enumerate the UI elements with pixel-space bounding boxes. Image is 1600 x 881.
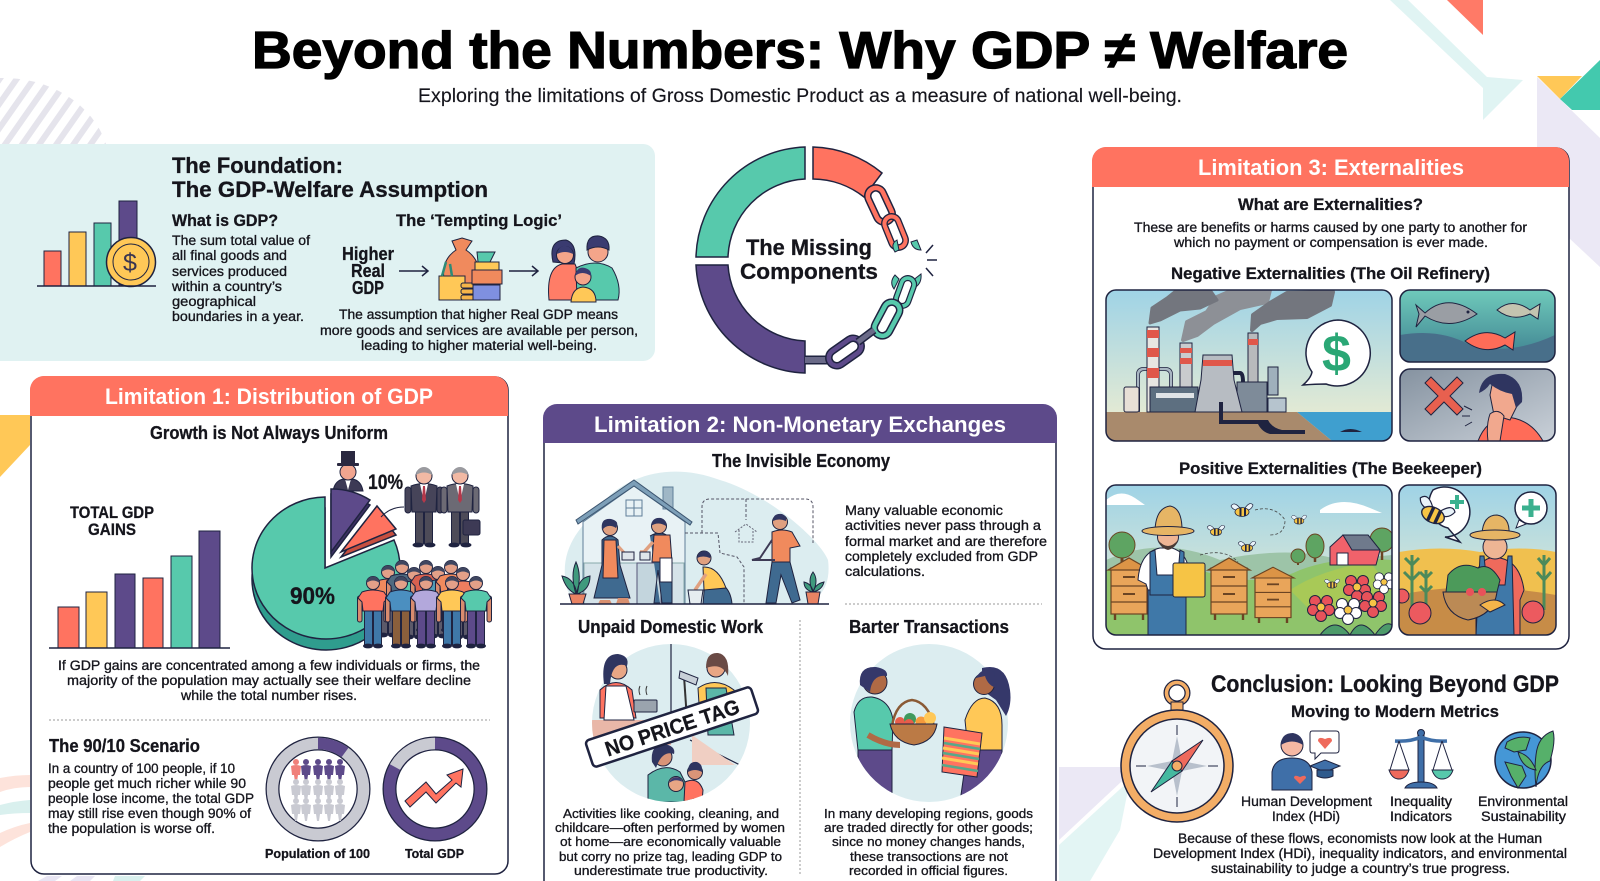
person kneeling with basket xyxy=(688,551,732,604)
what are externalities: What are Externalities? xyxy=(1238,195,1423,214)
invisible economy text: Many valuable economic xyxy=(845,503,1003,518)
metric: human development index: Index (HDi) xyxy=(1272,809,1340,824)
icon: compass xyxy=(1121,682,1233,822)
chain ring: the missing components xyxy=(696,147,937,373)
icon: crowd of people xyxy=(358,560,492,648)
tempting logic heading: The ‘Tempting Logic’ xyxy=(396,211,562,230)
total GDP label: GAINS xyxy=(88,520,136,539)
invisible economy text: completely excluded from GDP xyxy=(845,549,1038,564)
woman cooking xyxy=(594,519,634,604)
foundation heading: The Foundation: xyxy=(172,153,343,178)
barter text: these transoctions are not xyxy=(850,849,1008,864)
donut: population of 100 xyxy=(272,744,364,834)
donut labels xyxy=(265,846,464,861)
panel: limitation 1 xyxy=(30,376,508,874)
fruit basket xyxy=(890,700,937,745)
illustration: barter xyxy=(850,644,1010,802)
90/10 scenario text: The 90/10 Scenario xyxy=(49,736,200,756)
unpaid work text: but corry no prize tag, leading GDP to xyxy=(559,849,782,864)
metric: environmental sustainability: Sustainability xyxy=(1481,809,1566,824)
teal links xyxy=(871,276,916,339)
panel: foundation xyxy=(0,144,655,361)
ring label xyxy=(740,235,878,284)
illustration: coughing person xyxy=(1400,369,1555,441)
donut: total GDP xyxy=(390,743,480,834)
negative externalities heading: Negative Externalities (The Oil Refinery) xyxy=(1171,264,1490,283)
broken teal tips xyxy=(892,240,921,289)
barter text xyxy=(824,806,1034,878)
illustration: polluted fish xyxy=(1400,290,1555,362)
plant pots xyxy=(562,562,824,604)
icon: bar chart with coin xyxy=(37,201,156,286)
metric: environmental sustainability xyxy=(1478,731,1568,824)
speech bubble: plus xyxy=(1515,492,1547,528)
ring: purple segment xyxy=(696,265,805,373)
ring label: Components xyxy=(740,259,878,284)
what are externalities xyxy=(1134,195,1528,250)
pie chart: 90/10 xyxy=(252,489,404,650)
ring label: The Missing xyxy=(746,235,872,260)
conclusion text: Because of these flows, economists now look at the Human xyxy=(1178,831,1542,846)
90 percent label: 90% xyxy=(290,583,335,610)
spark lines xyxy=(926,245,937,276)
what is GDP: all final goods and xyxy=(172,248,287,263)
distribution text xyxy=(58,658,480,703)
limitation 2 header: Limitation 2: Non-Monetary Exchanges xyxy=(594,412,1006,437)
10 percent label: 10% xyxy=(368,471,403,494)
90/10 scenario text xyxy=(48,736,254,836)
metric: human development index xyxy=(1241,731,1372,824)
conclusion section xyxy=(1121,671,1568,876)
conclusion text: sustainability to judge a country’s true progress. xyxy=(1211,861,1510,876)
assumption text: The assumption that higher Real GDP means xyxy=(339,307,618,322)
higher real GDP label: Real xyxy=(351,261,385,281)
barter text: In many developing regions, goods xyxy=(824,806,1034,821)
foundation heading: The GDP-Welfare Assumption xyxy=(172,177,488,202)
what is GDP: boundaries in a year. xyxy=(172,309,304,324)
metric: human development index: Human Development xyxy=(1241,794,1372,809)
foundation heading xyxy=(172,153,488,202)
metric: environmental sustainability: Environmental xyxy=(1478,794,1568,809)
woman with mop xyxy=(679,653,738,735)
unpaid work text: Activities like cooking, cleaning, and xyxy=(563,806,779,821)
coral links xyxy=(865,185,908,250)
assumption text: leading to higher material well-being. xyxy=(361,338,597,353)
what are externalities: These are benefits or harms caused by one party to another for xyxy=(1134,220,1528,235)
donut labels: Population of 100 xyxy=(265,846,370,861)
purple links xyxy=(805,330,874,369)
farmer figure xyxy=(1443,515,1524,635)
woman at stove xyxy=(600,654,657,720)
metric: inequality indicators: Indicators xyxy=(1390,809,1452,824)
woman with cloth xyxy=(942,667,1010,802)
metric: inequality indicators: Inequality xyxy=(1390,794,1452,809)
90/10 scenario text: people lose income, the total GDP xyxy=(48,791,254,806)
distribution text: If GDP gains are concentrated among a few individuals or firms, the xyxy=(58,658,480,673)
conclusion text xyxy=(1153,831,1567,876)
conclusion heading: Moving to Modern Metrics xyxy=(1291,702,1499,721)
invisible economy text: formal market and are therefore xyxy=(845,534,1047,549)
conclusion text: Development Index (HDi), inequality indicators, and environmental xyxy=(1153,846,1567,861)
tag: no price tag: NO PRICE TAG xyxy=(602,696,743,761)
unpaid work text: ot home—are economically valuable xyxy=(560,834,781,849)
invisible economy text: calculations. xyxy=(845,564,925,579)
90/10 scenario text: people get much richer while 90 xyxy=(48,776,246,791)
what is GDP xyxy=(171,211,310,324)
assumption text xyxy=(320,307,638,353)
limitation 1 header xyxy=(30,376,508,416)
limitation 2 header xyxy=(543,404,1057,443)
what is GDP: within a country’s xyxy=(171,279,282,294)
unpaid work text: childcare—often performed by women xyxy=(555,820,785,835)
icon: top hat man xyxy=(333,451,363,491)
icon: red cross xyxy=(1425,377,1463,415)
icon: bar chart with coin: $ xyxy=(123,249,137,277)
illustration: beekeeper xyxy=(1106,485,1395,635)
icon: family xyxy=(549,236,619,302)
donut labels: Total GDP xyxy=(405,846,464,861)
barter heading: Barter Transactions xyxy=(849,617,1009,637)
what is GDP: services produced xyxy=(172,264,287,279)
illustration: unpaid work xyxy=(585,644,759,802)
total GDP label: TOTAL GDP xyxy=(70,503,154,522)
what are externalities: which no payment or compensation is ever made. xyxy=(1173,235,1488,250)
limitation 1 header: Limitation 1: Distribution of GDP xyxy=(105,384,433,409)
barter text: recorded in official figures. xyxy=(849,863,1008,878)
limitation 3 header xyxy=(1092,147,1569,187)
higher real GDP label: Higher xyxy=(342,244,394,264)
distribution text: majority of the population may actually see their welfare decline xyxy=(67,673,471,688)
panel: limitation 3 xyxy=(1092,147,1569,649)
icon: two businessmen xyxy=(405,467,480,547)
ring: coral segment xyxy=(813,147,882,197)
man with basket xyxy=(854,667,900,802)
invisible economy heading: The Invisible Economy xyxy=(712,451,890,471)
what is GDP: geographical xyxy=(172,294,256,309)
what is GDP: The sum total value of xyxy=(172,233,310,248)
90/10 scenario text: may still rise even though 90% of xyxy=(48,806,251,821)
total GDP label xyxy=(70,503,154,539)
mother and children xyxy=(648,744,703,802)
90/10 scenario text: the population is worse off. xyxy=(48,821,215,836)
bar chart: total GDP gains xyxy=(49,531,230,648)
title: Beyond the Numbers: Why GDP ≠ Welfare xyxy=(252,22,1348,80)
man with broom xyxy=(752,514,800,603)
conclusion heading: Conclusion: Looking Beyond GDP xyxy=(1211,671,1559,698)
distribution text: while the total number rises. xyxy=(180,688,357,703)
speech bubble: bee xyxy=(1413,487,1470,542)
icon: rising arrow xyxy=(405,769,463,807)
invisible economy text xyxy=(845,503,1047,579)
population icons xyxy=(291,759,345,821)
beekeeper figure xyxy=(1138,506,1205,635)
icon: goods stack xyxy=(439,238,502,300)
illustration: invisible economy xyxy=(560,472,829,604)
unpaid work text xyxy=(555,806,785,878)
limitation 3 header: Limitation 3: Externalities xyxy=(1198,155,1464,180)
invisible economy text: activities never pass through a xyxy=(845,518,1042,533)
subtitle: Exploring the limitations of Gross Domestic Product as a measure of national well-being. xyxy=(418,86,1182,107)
higher real GDP label xyxy=(342,244,394,298)
man cooking xyxy=(640,518,672,603)
unpaid work text: underestimate true productivity. xyxy=(574,863,768,878)
metric: inequality indicators xyxy=(1389,730,1453,824)
growth heading: Growth is Not Always Uniform xyxy=(150,423,388,443)
ring: teal segment xyxy=(696,147,805,257)
speech bubble: dollar xyxy=(1303,320,1370,386)
speech bubble: dollar: $ xyxy=(1322,325,1351,383)
arrow: goods to family xyxy=(509,266,538,276)
90/10 scenario text: In a country of 100 people, if 10 xyxy=(48,761,235,776)
arrow: GDP to goods xyxy=(399,266,428,276)
what is GDP: What is GDP? xyxy=(172,211,278,230)
barter text: are traded directly for other goods; xyxy=(824,820,1033,835)
illustration: farmer xyxy=(1395,485,1556,635)
conclusion heading xyxy=(1211,671,1559,721)
unpaid work heading: Unpaid Domestic Work xyxy=(578,617,764,637)
panel: limitation 2 xyxy=(543,404,1057,881)
barter text: since no money changes hands, xyxy=(832,834,1025,849)
illustration: oil refinery xyxy=(1106,290,1392,441)
higher real GDP label: GDP xyxy=(352,278,384,298)
positive externalities heading: Positive Externalities (The Beekeeper) xyxy=(1179,459,1482,478)
assumption text: more goods and services are available per person, xyxy=(320,323,638,338)
